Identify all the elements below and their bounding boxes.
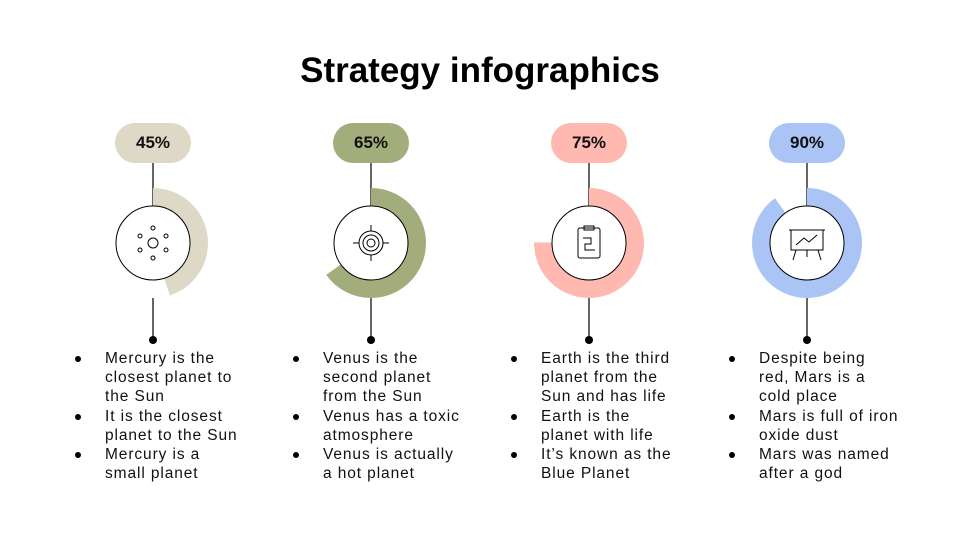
text: mars bullets: Mars was named: [759, 446, 890, 463]
text: venus bullets: a hot planet: [323, 465, 415, 482]
chart: ring 75%: [534, 163, 644, 344]
label: 75%: 75%: [572, 133, 606, 152]
text: venus bullets: Venus has a toxic: [323, 408, 460, 425]
text: mars bullets: oxide dust: [759, 427, 839, 444]
chart: ring 45%: [116, 163, 208, 344]
title: Strategy infographics: [300, 51, 660, 90]
text: earth bullets: Blue Planet: [541, 465, 630, 482]
panel: mercury 45%: [75, 123, 238, 482]
panel: earth 75%: [511, 123, 671, 482]
text: mercury bullets: the Sun: [105, 388, 165, 405]
text: mars bullets: Despite being: [759, 350, 866, 367]
panel: venus 65%: [293, 123, 460, 482]
label: 90%: 90%: [790, 133, 824, 152]
label: 45%: 45%: [136, 133, 170, 152]
label: 45%: [115, 123, 191, 163]
text: earth bullets: [511, 350, 671, 482]
text: venus bullets: second planet: [323, 369, 431, 386]
text: mercury bullets: small planet: [105, 465, 199, 482]
text: mercury bullets: planet to the Sun: [105, 427, 238, 444]
text: earth bullets: Sun and has life: [541, 388, 667, 405]
text: mars bullets: Mars is full of iron: [759, 408, 898, 425]
text: mercury bullets: It is the closest: [105, 408, 223, 425]
label: 90%: [769, 123, 845, 163]
panel: mars 90%: [729, 123, 898, 482]
text: mars bullets: red, Mars is a: [759, 369, 866, 386]
label: 65%: 65%: [354, 133, 388, 152]
chart: ring 90%: [752, 163, 862, 344]
text: venus bullets: atmosphere: [323, 427, 414, 444]
text: mercury bullets: Mercury is a: [105, 446, 200, 463]
text: earth bullets: Earth is the: [541, 408, 630, 425]
text: mars bullets: after a god: [759, 465, 843, 482]
text: mercury bullets: closest planet to: [105, 369, 232, 386]
text: venus bullets: Venus is the: [323, 350, 418, 367]
text: earth bullets: Earth is the third: [541, 350, 670, 367]
text: venus bullets: Venus is actually: [323, 446, 454, 463]
text: earth bullets: planet from the: [541, 369, 658, 386]
text: venus bullets: [293, 350, 460, 482]
label: 75%: [551, 123, 627, 163]
label: 65%: [333, 123, 409, 163]
text: mars bullets: cold place: [759, 388, 838, 405]
text: mercury bullets: [75, 350, 238, 482]
text: venus bullets: from the Sun: [323, 388, 423, 405]
chart: ring 65%: [326, 163, 426, 344]
text: earth bullets: planet with life: [541, 427, 654, 444]
text: earth bullets: It’s known as the: [541, 446, 671, 463]
text: mercury bullets: Mercury is the: [105, 350, 215, 367]
text: mars bullets: [729, 350, 898, 482]
